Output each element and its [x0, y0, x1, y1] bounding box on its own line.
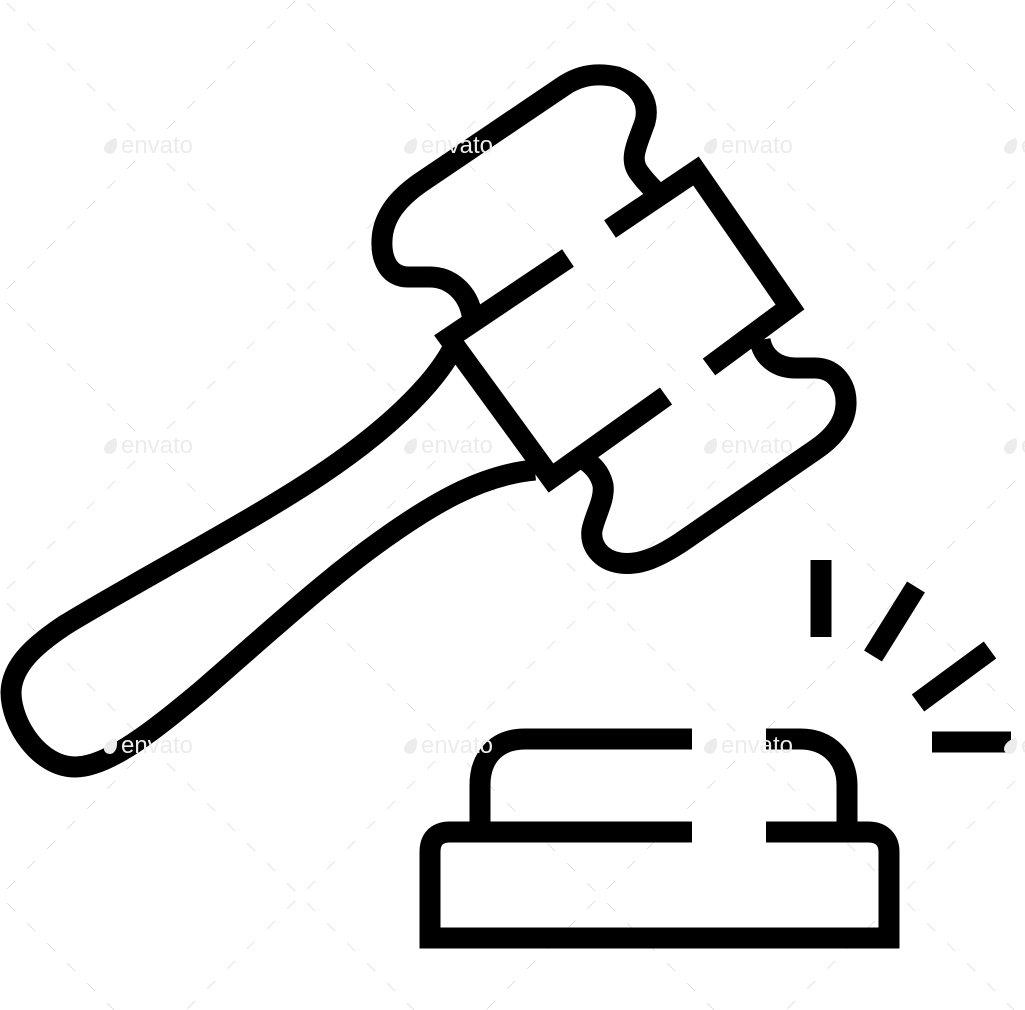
icon: sound block: [430, 739, 889, 938]
gavel handle: [11, 350, 535, 767]
block top right: [766, 739, 847, 832]
watermarks: envato: [721, 432, 793, 459]
watermarks: envato: [721, 732, 793, 759]
icon: impact lines: [821, 560, 1011, 742]
watermarks: envato: [121, 132, 193, 159]
watermarks: [104, 132, 1025, 759]
watermarks: envato: [121, 432, 193, 459]
block base: [430, 832, 889, 938]
block top left: [480, 739, 692, 832]
watermarks: envato: [721, 132, 793, 159]
gavel head block: [449, 171, 790, 478]
watermarks: envato: [421, 432, 493, 459]
gavel lower cap: [585, 340, 846, 564]
gavel upper cap: [382, 75, 656, 315]
watermarks: envato: [421, 732, 493, 759]
watermarks: envato: [421, 132, 493, 159]
icon: gavel hammer: [11, 75, 846, 767]
watermarks: envato: [121, 732, 193, 759]
